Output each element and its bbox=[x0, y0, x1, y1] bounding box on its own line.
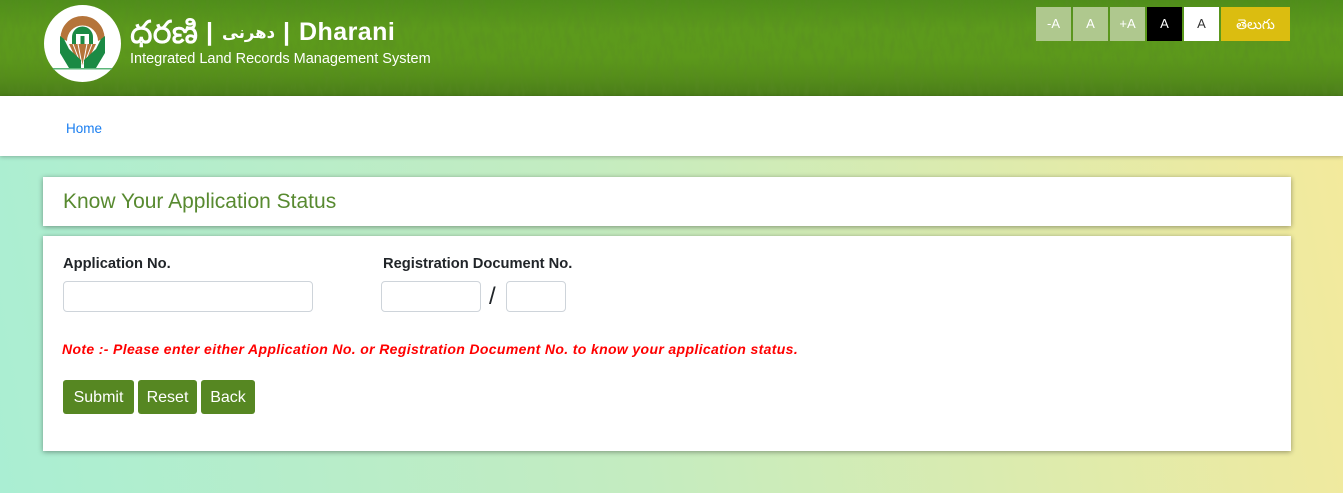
heading: Know Your Application Status bbox=[63, 190, 336, 213]
header banner bbox=[0, 0, 1343, 96]
form panel bbox=[43, 236, 1291, 451]
font size controls: A bbox=[1160, 16, 1169, 31]
font size controls bbox=[1036, 7, 1290, 41]
form fields and actions bbox=[62, 256, 798, 414]
font size controls: తెలుగు bbox=[1236, 16, 1275, 32]
font size controls: -A bbox=[1047, 16, 1060, 31]
back button bbox=[201, 380, 255, 414]
reset button: Reset bbox=[147, 389, 188, 406]
grass texture bbox=[0, 0, 1343, 96]
font size controls: +A bbox=[1119, 16, 1136, 31]
site title bbox=[130, 14, 395, 50]
submit button bbox=[63, 380, 134, 414]
logo bbox=[44, 5, 121, 82]
site title: دھرنی bbox=[222, 24, 275, 42]
document year input bbox=[506, 281, 566, 312]
back button: Back bbox=[210, 389, 246, 406]
site title: Dharani bbox=[299, 18, 395, 46]
submit button: Submit bbox=[74, 389, 123, 406]
document number input bbox=[381, 281, 481, 312]
reset button bbox=[138, 380, 197, 414]
navigation bar bbox=[0, 96, 1343, 156]
site title: | bbox=[206, 18, 213, 46]
note: Note :- Please enter either Application No. or Registration Document No. to know your application status. bbox=[62, 341, 798, 357]
site title: ధరణి bbox=[130, 14, 198, 50]
application number input bbox=[63, 281, 313, 312]
font size controls: A bbox=[1086, 16, 1095, 31]
font size controls: A bbox=[1197, 16, 1206, 31]
application number label: Application No. bbox=[63, 256, 171, 272]
home link: Home bbox=[66, 121, 102, 136]
separator: / bbox=[489, 283, 496, 310]
page heading panel bbox=[43, 177, 1291, 226]
subtitle: Integrated Land Records Management System bbox=[130, 51, 431, 67]
site title: | bbox=[283, 18, 290, 46]
registration document label: Registration Document No. bbox=[383, 256, 572, 272]
